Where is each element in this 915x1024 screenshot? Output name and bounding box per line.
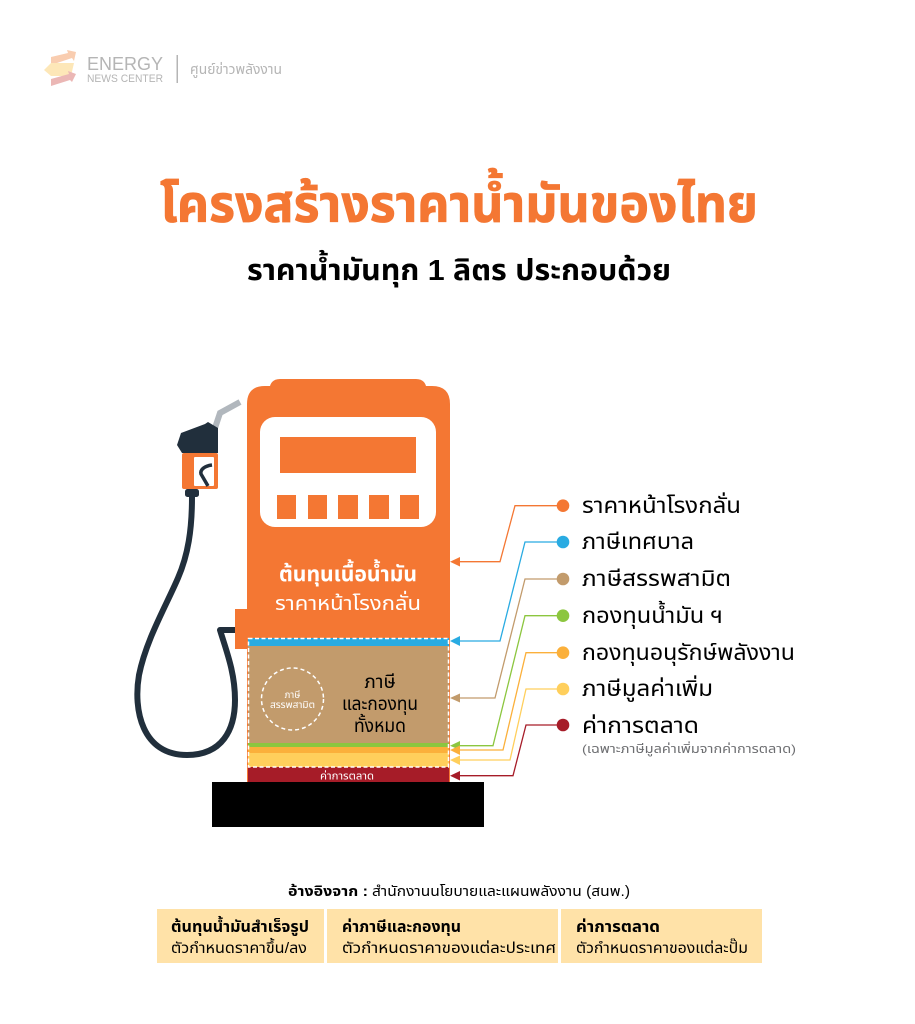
logo subtitle: NEWS CENTER: [87, 73, 163, 85]
layer: energy conservation fund: [248, 747, 449, 753]
layer: marketing margin: [248, 767, 449, 782]
fuel hose: [137, 497, 236, 755]
taxes and funds label: ทั้งหมด: [354, 713, 406, 737]
taxes and funds label: [342, 672, 418, 737]
legend item: conservation fund: กองทุนอนุรักษ์พลังงาน: [582, 640, 795, 666]
icon: logo arrows: [44, 50, 76, 86]
layer: excise tax: [248, 646, 449, 743]
info box: refined oil cost: ตัวกำหนดราคาขึ้น/ลง: [171, 937, 307, 957]
legend: [557, 491, 796, 756]
arrow: oil fund: [450, 616, 563, 750]
fuel pump body: [235, 379, 450, 782]
info box: marketing margin: ค่าการตลาด: [576, 918, 660, 936]
title: โครงสร้างราคาน้ำมันของไทย: [160, 168, 758, 234]
arrow: conservation fund: [450, 653, 563, 755]
arrow: marketing margin: [450, 725, 563, 780]
legend item: marketing margin: ค่าการตลาด: [582, 713, 699, 738]
arrow: municipal tax: [450, 542, 563, 646]
excise circle: ภาษี: [285, 690, 300, 701]
logo wordmark: ENERGY: [87, 54, 163, 74]
taxes and funds label: และกองทุน: [342, 694, 418, 715]
legend item: VAT: ภาษีมูลค่าเพิ่ม: [582, 674, 713, 702]
excise circle: [262, 668, 324, 730]
layer: municipal tax: [248, 638, 449, 646]
legend leaders: [450, 506, 563, 780]
arrow: excise tax: [450, 579, 563, 702]
layer: oil fund: [248, 743, 449, 747]
info box: taxes and funds: ค่าภาษีและกองทุน: [342, 918, 461, 936]
logo: Energy News Center: [44, 50, 282, 86]
legend item: marketing margin: (เฉพาะภาษีมูลค่าเพิ่มจากค่าการตลาด): [582, 741, 796, 756]
marketing margin label: ค่าการตลาด: [320, 770, 374, 782]
info box: taxes and funds: ตัวกำหนดราคาของแต่ละประเทศ: [342, 939, 556, 957]
legend item: oil fund: กองทุนน้ำมัน ฯ: [582, 600, 723, 629]
legend item: VAT: [557, 674, 713, 702]
info box: refined oil cost: ต้นทุนน้ำมันสำเร็จรูป: [171, 915, 309, 937]
info box: taxes and funds: [327, 909, 558, 963]
source note: สำนักงานนโยบายและแผนพลังงาน (สนพ.): [372, 884, 630, 900]
source note: อ้างอิงจาก :: [288, 884, 368, 900]
icon: fuel nozzle: [177, 402, 240, 497]
subtitle: ราคาน้ำมันทุก 1 ลิตร ประกอบด้วย: [247, 249, 671, 287]
legend item: refinery price: ราคาหน้าโรงกลั่น: [582, 491, 741, 518]
pump display panel: [260, 417, 436, 527]
info box: marketing margin: [561, 909, 762, 963]
info box: refined oil cost: [157, 909, 324, 963]
legend item: oil fund: [557, 600, 723, 629]
legend item: municipal tax: ภาษีเทศบาล: [582, 529, 694, 554]
legend item: excise tax: ภาษีสรรพสามิต: [582, 566, 731, 591]
taxes and funds label: ภาษี: [364, 672, 396, 693]
arrow: VAT: [450, 689, 563, 765]
arrow: refinery price: [450, 506, 563, 566]
legend item: marketing margin: [557, 713, 796, 756]
logo Thai name: ศูนย์ข่าวพลังงาน: [190, 61, 282, 78]
excise circle: สรรพสามิต: [270, 700, 315, 711]
crude cost label: ต้นทุนเนื้อน้ำมัน: [279, 559, 417, 587]
refinery price label: ราคาหน้าโรงกลั่น: [275, 590, 421, 615]
layer: VAT: [248, 753, 449, 767]
info box: marketing margin: ตัวกำหนดราคาของแต่ละปั๊ม: [576, 938, 748, 957]
pump base: [212, 782, 484, 827]
